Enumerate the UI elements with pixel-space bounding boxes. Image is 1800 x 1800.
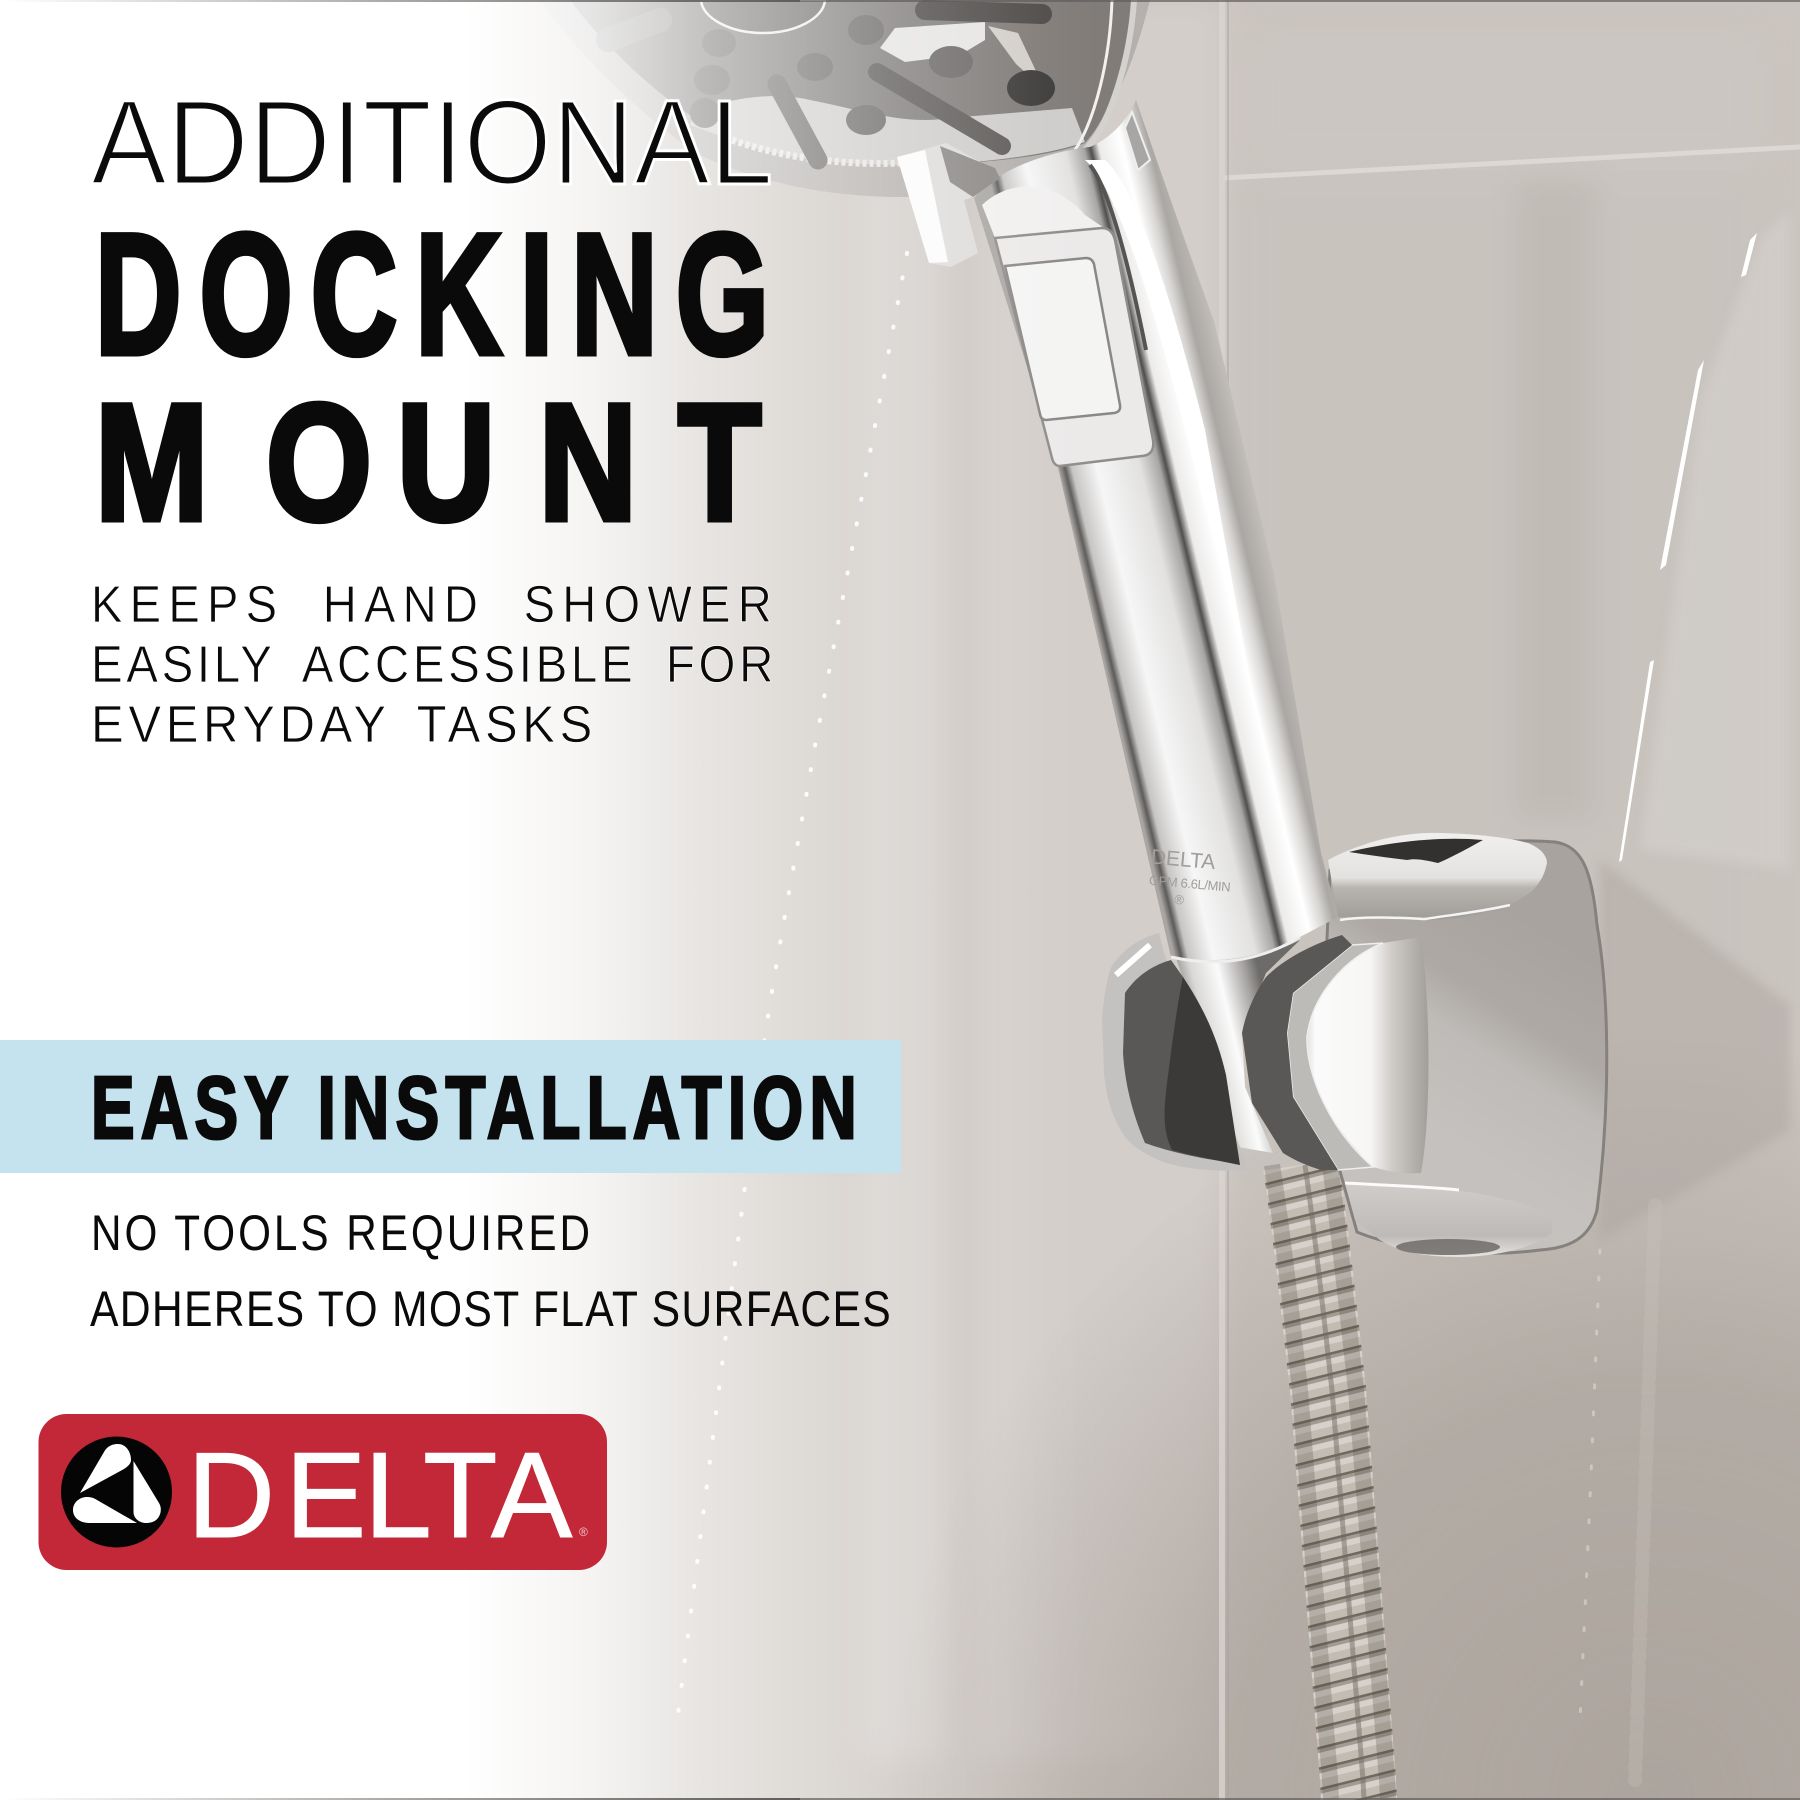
rim [1075,0,1112,150]
base plate [1320,841,1607,1253]
background: tile wall [550,0,1800,1800]
center spray [701,0,825,33]
product etching: ® [1174,892,1185,908]
head skirt [540,0,1150,197]
hose [1272,1165,1388,1800]
bottom edge line [0,1798,800,1800]
panel reflection on tile [1648,230,1784,862]
upper wing dark reflection [1349,839,1483,863]
product etching: GPM 6.6L/MIN [1148,872,1231,895]
subtitle [91,576,779,754]
button surround [995,228,1153,466]
clip bracket [897,143,1000,267]
left chrome ring [1102,933,1249,1171]
icon: Delta triangle mark [61,1436,172,1548]
wall mount [1320,833,1607,1257]
nozzle bars [608,10,1042,160]
lower wall shading [978,1144,1800,1800]
chrome ring right [1287,943,1383,1170]
installation notes [90,1205,892,1337]
logo: Delta [38,1414,607,1570]
panel: easy installation band [0,1040,901,1173]
title line 3: MOUNT [95,371,761,556]
rope edge [732,140,900,163]
subtitle: EVERYDAY TASKS [91,696,597,754]
product etching: DELTA [1150,846,1216,874]
subtitle: EASILY ACCESSIBLE FOR [91,636,777,694]
nozzles [690,15,1055,135]
installation notes: ADHERES TO MOST FLAT SURFACES [90,1281,892,1337]
head face [570,0,1134,165]
band heading: EASY INSTALLATION [91,1058,863,1157]
title line 1: ADDITIONAL [91,74,773,210]
product etching [1147,846,1234,912]
lower wing [1345,1183,1552,1257]
logo wordmark: DELTA [187,1427,573,1563]
lower tube [1176,940,1300,1153]
mount clamp [1102,933,1429,1173]
top edge line [0,0,800,2]
shower head [540,0,1150,197]
right rubber [1242,935,1352,1170]
hand shower handle [897,100,1338,1153]
chrome reflections [880,22,985,62]
glints on tile [1619,233,1757,862]
title line 2: DOCKING [95,198,787,390]
title [91,74,787,556]
left rubber [1123,960,1238,1163]
button [1005,258,1120,420]
upper wing [1328,833,1547,920]
shoulder [1307,937,1429,1173]
mount shadow on wall [1600,860,1790,1240]
mount screw [1125,112,1150,170]
subtitle: KEEPS HAND SHOWER [91,576,779,634]
grout lines [1223,147,1800,178]
water drops [677,253,1655,1780]
neck bend highlight [982,187,1110,238]
installation notes: NO TOOLS REQUIRED [91,1205,593,1261]
registered mark: ® [579,1525,588,1539]
